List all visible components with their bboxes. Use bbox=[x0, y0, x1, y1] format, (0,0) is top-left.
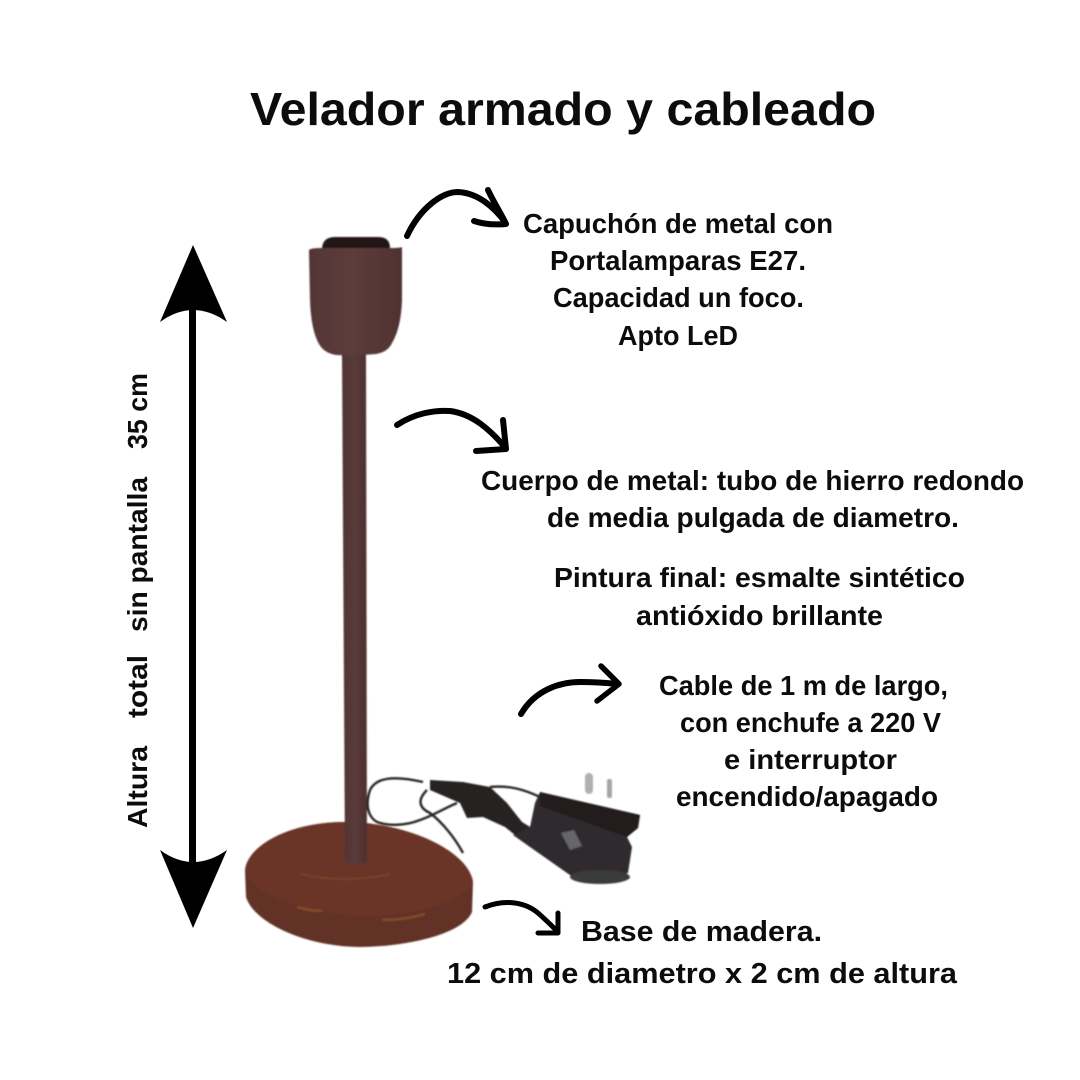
metal cap bbox=[309, 247, 402, 355]
arrow: to cap bbox=[407, 190, 506, 236]
switch body bbox=[513, 792, 640, 883]
cord clump bbox=[430, 780, 535, 847]
lamp tube bbox=[342, 354, 367, 864]
lamp illustration bbox=[245, 237, 640, 947]
text: cable description: Cable de 1 m de largo, bbox=[659, 670, 948, 701]
text: cap description: Capacidad un foco. bbox=[553, 282, 804, 313]
vertical label: height bbox=[122, 373, 153, 828]
text: base description: Base de madera. bbox=[581, 916, 822, 948]
dimension arrow: total height bbox=[160, 245, 227, 928]
text: base description bbox=[447, 916, 958, 990]
vertical label: height: sin pantalla bbox=[122, 476, 153, 632]
text: cable description: con enchufe a 220 V bbox=[680, 707, 942, 738]
text: cable description: e interruptor bbox=[724, 744, 897, 775]
plug pins bbox=[585, 773, 593, 794]
text: body description bbox=[481, 465, 1024, 533]
text: cap description: Apto LeD bbox=[618, 320, 738, 351]
text: cap description: Capuchón de metal con bbox=[523, 208, 833, 239]
vertical label: height: total bbox=[122, 655, 153, 718]
lamp socket rim bbox=[322, 237, 390, 252]
arrow: to body bbox=[397, 411, 506, 451]
text: paint description bbox=[554, 562, 965, 631]
vertical label: height: Altura bbox=[122, 745, 153, 828]
lamp base bbox=[245, 822, 473, 947]
text: paint description: Pintura final: esmalte sintético bbox=[554, 562, 965, 593]
vertical label: height: 35 cm bbox=[122, 373, 153, 449]
cable and switch bbox=[368, 773, 640, 884]
text: cap description bbox=[523, 208, 833, 351]
text: body description: de media pulgada de diametro. bbox=[547, 502, 959, 533]
text: cable description bbox=[659, 670, 948, 812]
arrow: to base bbox=[485, 902, 558, 933]
title: Velador armado y cableado bbox=[250, 83, 876, 135]
text: cable description: encendido/apagado bbox=[676, 781, 938, 812]
text: cap description: Portalamparas E27. bbox=[550, 245, 806, 276]
text: paint description: antióxido brillante bbox=[636, 600, 883, 631]
text: base description: 12 cm de diametro x 2 cm de altura bbox=[447, 958, 958, 990]
arrow: to cable bbox=[521, 666, 619, 714]
text: body description: Cuerpo de metal: tubo de hierro redondo bbox=[481, 465, 1024, 496]
